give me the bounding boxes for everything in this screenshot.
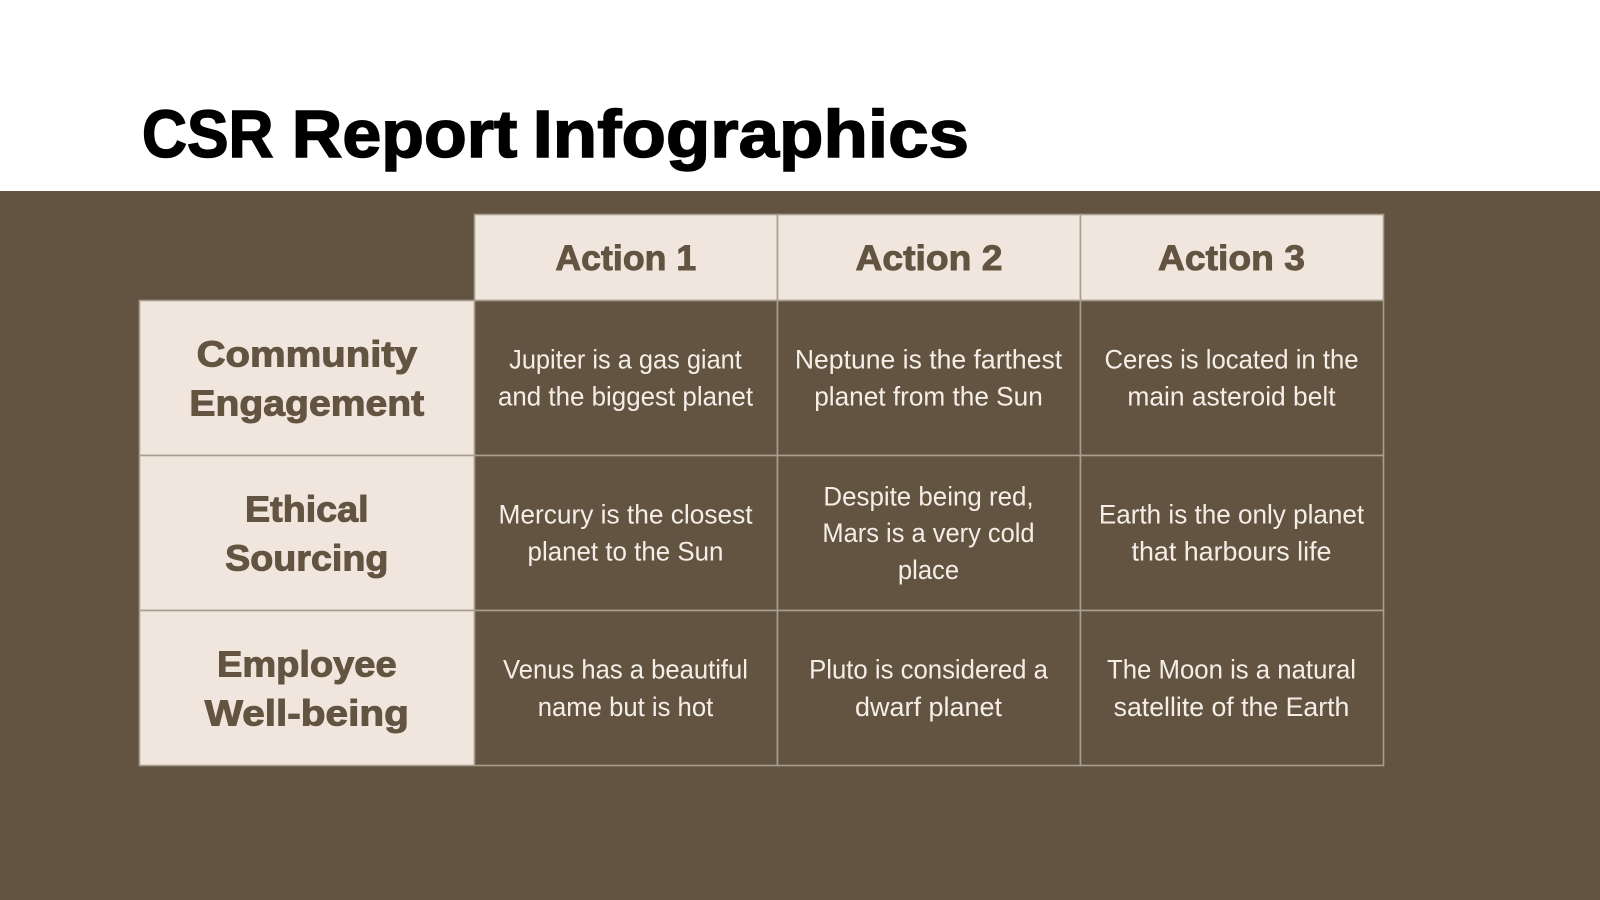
cell: Ethical Action 2: place <box>898 555 959 585</box>
cell: Community Action 2: planet from the Sun <box>814 382 1043 412</box>
row label: Employee Well-being: Well-being <box>205 692 409 734</box>
row label: Employee Well-being: Employee <box>217 644 397 684</box>
cell: Ethical Action 2: Despite being red, <box>823 481 1034 511</box>
title: CSR <box>142 97 274 172</box>
row label: Employee Well-being <box>140 610 474 766</box>
cell: Community Action 3 <box>1080 300 1384 456</box>
table <box>140 214 1384 766</box>
cell: Employee Action 2: Pluto is considered a <box>809 655 1048 685</box>
header: Action 3 <box>1080 214 1384 300</box>
row label: Ethical Sourcing: Sourcing <box>225 538 388 578</box>
cell: Ethical Action 2 <box>778 456 1080 610</box>
cell: Employee Action 1 <box>474 610 778 766</box>
cell: Employee Action 2: dwarf planet <box>855 692 1003 722</box>
header: Action 2: Action 2 <box>856 239 1002 278</box>
cell: Ethical Action 1 <box>474 456 778 610</box>
header: Action 1: Action 1 <box>555 239 696 278</box>
header: Action 3: Action 3 <box>1158 239 1305 278</box>
row label: Ethical Sourcing <box>140 456 474 610</box>
cell: Community Action 2: Neptune is the farthest <box>795 344 1063 374</box>
cell: Ethical Action 3 <box>1080 456 1384 610</box>
cell: Ethical Action 1: Mercury is the closest <box>498 500 753 530</box>
cell: Ethical Action 1: planet to the Sun <box>528 537 723 567</box>
row label: Community Engagement <box>140 300 474 456</box>
title: Report <box>292 97 517 172</box>
cell: Community Action 2 <box>778 300 1080 456</box>
cell: Ethical Action 2: Mars is a very cold <box>822 518 1035 548</box>
row label: Community Engagement: Community <box>197 334 417 374</box>
cell: Community Action 1: Jupiter is a gas giant <box>509 344 742 374</box>
cell: Ethical Action 3: Earth is the only planet <box>1099 500 1365 530</box>
cell: Community Action 3: Ceres is located in the <box>1104 344 1359 374</box>
background panel <box>0 191 1600 900</box>
cell: Community Action 1 <box>474 300 778 456</box>
cell: Employee Action 3: satellite of the Earth <box>1114 692 1349 722</box>
cell: Ethical Action 3: that harbours life <box>1132 537 1332 567</box>
cell: Community Action 1: and the biggest planet <box>498 382 754 412</box>
cell: Employee Action 1: name but is hot <box>538 692 714 722</box>
row label: Ethical Sourcing: Ethical <box>245 488 369 530</box>
header: Action 2 <box>778 214 1080 300</box>
header: Action 1 <box>474 214 778 300</box>
cell: Employee Action 3 <box>1080 610 1384 766</box>
title: Infographics <box>533 97 969 172</box>
cell: Community Action 3: main asteroid belt <box>1127 382 1336 412</box>
cell: Employee Action 2 <box>778 610 1080 766</box>
cell: Employee Action 1: Venus has a beautiful <box>503 655 748 685</box>
cell: Employee Action 3: The Moon is a natural <box>1107 655 1356 685</box>
row label: Community Engagement: Engagement <box>189 382 424 424</box>
